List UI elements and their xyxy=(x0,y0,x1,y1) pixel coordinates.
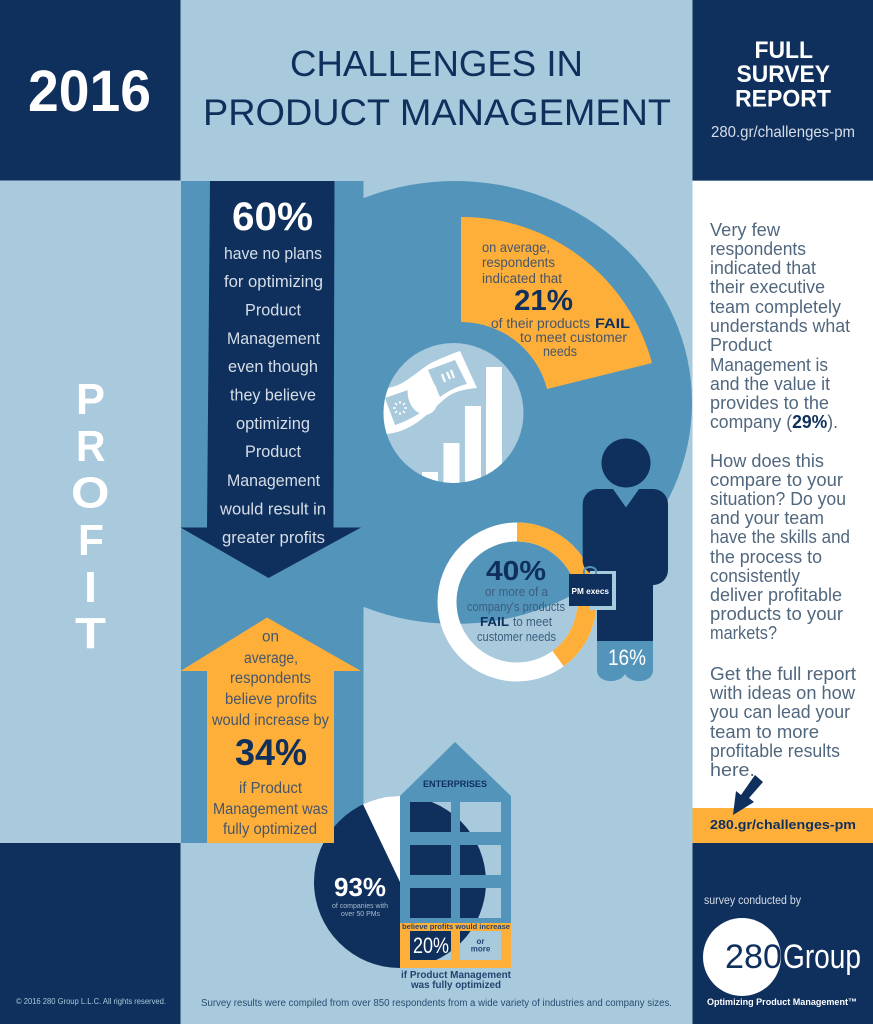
panel: orange sector 21%: needs xyxy=(543,344,577,359)
icon: enterprise building: ENTERPRISES xyxy=(423,779,487,789)
panel: orange sector 21%: respondents xyxy=(482,255,555,270)
icon: enterprise building: if Product Management xyxy=(401,969,511,981)
arrow: 34% up arrow: respondents xyxy=(230,670,311,687)
arrow: pointing to link xyxy=(733,775,763,815)
chart: donut 40%: customer needs xyxy=(477,629,556,644)
icon: enterprise building: or xyxy=(476,937,484,946)
year number: 2016 xyxy=(28,59,151,124)
arrow: 34% up arrow: 34% xyxy=(235,732,307,773)
text block: paragraph 3: here. xyxy=(710,759,755,780)
arrow: 60% down arrow: would result in xyxy=(219,500,326,518)
text block: paragraph 2 xyxy=(710,450,850,643)
text block: paragraph 2: and your team xyxy=(710,507,824,528)
vertical label: profit: F xyxy=(78,516,104,565)
icon: enterprise building: believe profits would increase xyxy=(402,922,510,931)
callout: report link: 280.gr/challenges-pm xyxy=(710,817,856,832)
arrow: 34% up arrow: fully optimized xyxy=(223,821,317,838)
icon: PM exec figure 16% xyxy=(569,438,668,681)
vertical label: profit: R xyxy=(76,422,106,471)
text block: paragraph 2: How does this xyxy=(710,450,824,471)
panel: orange sector 21%: of their products xyxy=(491,316,590,331)
arrow: 60% down arrow: 60% xyxy=(232,195,313,239)
icon: briefcase xyxy=(569,567,616,610)
panel: 280 Group logo: Optimizing Product Management™ xyxy=(707,997,857,1008)
text block: paragraph 2: compare to your xyxy=(710,469,843,490)
callout: report link xyxy=(692,808,873,843)
arrow: 60% down arrow: even though xyxy=(228,357,318,376)
chart: donut 40%: FAIL xyxy=(480,614,509,629)
panel: full survey report: SURVEY xyxy=(736,61,830,88)
chart: pie 93% xyxy=(314,796,486,968)
text block: paragraph 1: Very few xyxy=(710,219,781,240)
panel: year xyxy=(0,0,180,180)
chart: donut 40%: 40% xyxy=(486,555,546,586)
title: CHALLENGES IN xyxy=(290,43,583,84)
text block: paragraph 1: team completely xyxy=(710,296,842,317)
panel: full survey report xyxy=(692,0,873,180)
text block: paragraph 3: profitable results xyxy=(710,740,840,761)
icon: enterprise building: was fully optimized xyxy=(410,979,501,991)
text block: paragraph 1: and the value it xyxy=(710,373,830,394)
text block: paragraph 1: company (29%). xyxy=(710,411,838,432)
panel: 280 Group logo xyxy=(692,843,873,1024)
panel: full survey report: FULL xyxy=(754,37,813,64)
text block: paragraph 1: respondents xyxy=(710,238,806,259)
vertical label: profit xyxy=(71,375,110,658)
panel: orange sector 21%: on average, xyxy=(482,240,550,255)
icon: enterprise building xyxy=(400,742,511,991)
panel: copyright footer xyxy=(0,843,180,1024)
panel: right narrative xyxy=(692,181,873,808)
arrow: 60% down arrow: they believe xyxy=(230,386,316,404)
vertical label: profit: P xyxy=(76,375,105,424)
text block: paragraph 1 xyxy=(710,219,850,432)
text block: survey note: Survey results were compiled from over 850 respondents from a wide variety of industries and company sizes. xyxy=(201,998,672,1009)
arrow: 60% down arrow: for optimizing xyxy=(224,272,323,291)
text block: paragraph 1: Management is xyxy=(710,354,828,375)
arrow: 60% down arrow: have no plans xyxy=(224,244,322,263)
background: medium blue strip and ellipse xyxy=(181,181,692,843)
text block: paragraph 1: their executive xyxy=(710,276,825,297)
text block: paragraph 3: team to more xyxy=(710,721,819,742)
vertical label: profit: I xyxy=(84,563,97,612)
text block: paragraph 1: indicated that xyxy=(710,257,816,278)
text block: paragraph 1: Product xyxy=(710,334,772,355)
icon: enterprise building: 20% xyxy=(413,933,449,958)
arrow: 34% up arrow: if Product xyxy=(239,780,303,797)
panel: full survey report: REPORT xyxy=(735,86,831,112)
panel: orange sector 21%: 21% xyxy=(514,285,573,317)
arrow: 60% down arrow: optimizing xyxy=(236,414,310,433)
arrow: 34% up arrow: would increase by xyxy=(211,712,329,729)
chart: donut 40% xyxy=(447,532,587,672)
panel: copyright footer: © 2016 280 Group L.L.C. All rights reserved. xyxy=(16,997,166,1006)
text block: paragraph 2: markets? xyxy=(710,622,777,643)
text block: paragraph 2: the process to xyxy=(710,546,822,567)
title xyxy=(203,43,671,133)
arrow: 34% up arrow: average, xyxy=(244,650,298,667)
panel: orange sector 21%: to meet customer xyxy=(520,330,628,345)
title: PRODUCT MANAGEMENT xyxy=(203,92,671,133)
icon: money and rising bars xyxy=(384,343,524,483)
arrow: 60% down arrow: greater profits xyxy=(222,528,325,547)
arrow: 34% up arrow: believe profits xyxy=(225,691,317,708)
arrow: 34% up arrow: on xyxy=(262,628,279,646)
arrow: 60% down arrow: Management xyxy=(227,471,320,490)
text block: paragraph 3: with ideas on how xyxy=(709,682,856,703)
panel: orange sector 21% xyxy=(461,217,652,389)
arrow: 60% down arrow: Product xyxy=(245,442,301,461)
icon: briefcase: PM execs xyxy=(572,586,609,596)
arrow: 34% up arrow xyxy=(180,618,361,843)
panel: full survey report: 280.gr/challenges-pm xyxy=(711,124,855,141)
text block: paragraph 3: you can lead your xyxy=(710,701,850,722)
text block: paragraph 2: situation? Do you xyxy=(710,488,846,509)
text block: paragraph 1: understands what xyxy=(710,315,850,336)
arrow: 60% down arrow xyxy=(180,181,361,578)
chart: donut 40%: or more of a xyxy=(485,584,549,599)
text block: paragraph 3: Get the full report xyxy=(710,663,856,684)
panel: 280 Group logo: 280 xyxy=(725,938,782,976)
icon: enterprise building: more xyxy=(471,944,491,954)
text block: paragraph 3 xyxy=(709,663,856,780)
text block: paragraph 1: provides to the xyxy=(710,392,829,413)
vertical label: profit: T xyxy=(75,609,106,658)
chart: pie 93%: of companies with xyxy=(332,901,388,910)
arrow: 60% down arrow: Product xyxy=(245,300,301,320)
icon: PM exec figure 16%: 16% xyxy=(608,645,646,670)
panel: 280 Group logo: survey conducted by xyxy=(704,895,801,907)
arrow: 34% up arrow: Management was xyxy=(213,801,328,818)
panel: orange sector 21%: indicated that xyxy=(482,271,562,286)
chart: donut 40%: to meet xyxy=(513,614,552,629)
vertical label: profit: O xyxy=(71,468,110,518)
arrow: 60% down arrow: Management xyxy=(227,329,320,348)
text block: paragraph 2: have the skills and xyxy=(710,526,850,547)
text block: paragraph 2: consistently xyxy=(710,565,801,586)
panel: orange sector 21%: FAIL xyxy=(595,316,630,331)
chart: donut 40%: company's products xyxy=(467,599,565,614)
text block: paragraph 2: products to your xyxy=(710,603,843,624)
text block: paragraph 2: deliver profitable xyxy=(710,584,842,605)
chart: pie 93%: 93% xyxy=(334,872,386,902)
chart: pie 93%: over 50 PMs xyxy=(341,909,380,918)
